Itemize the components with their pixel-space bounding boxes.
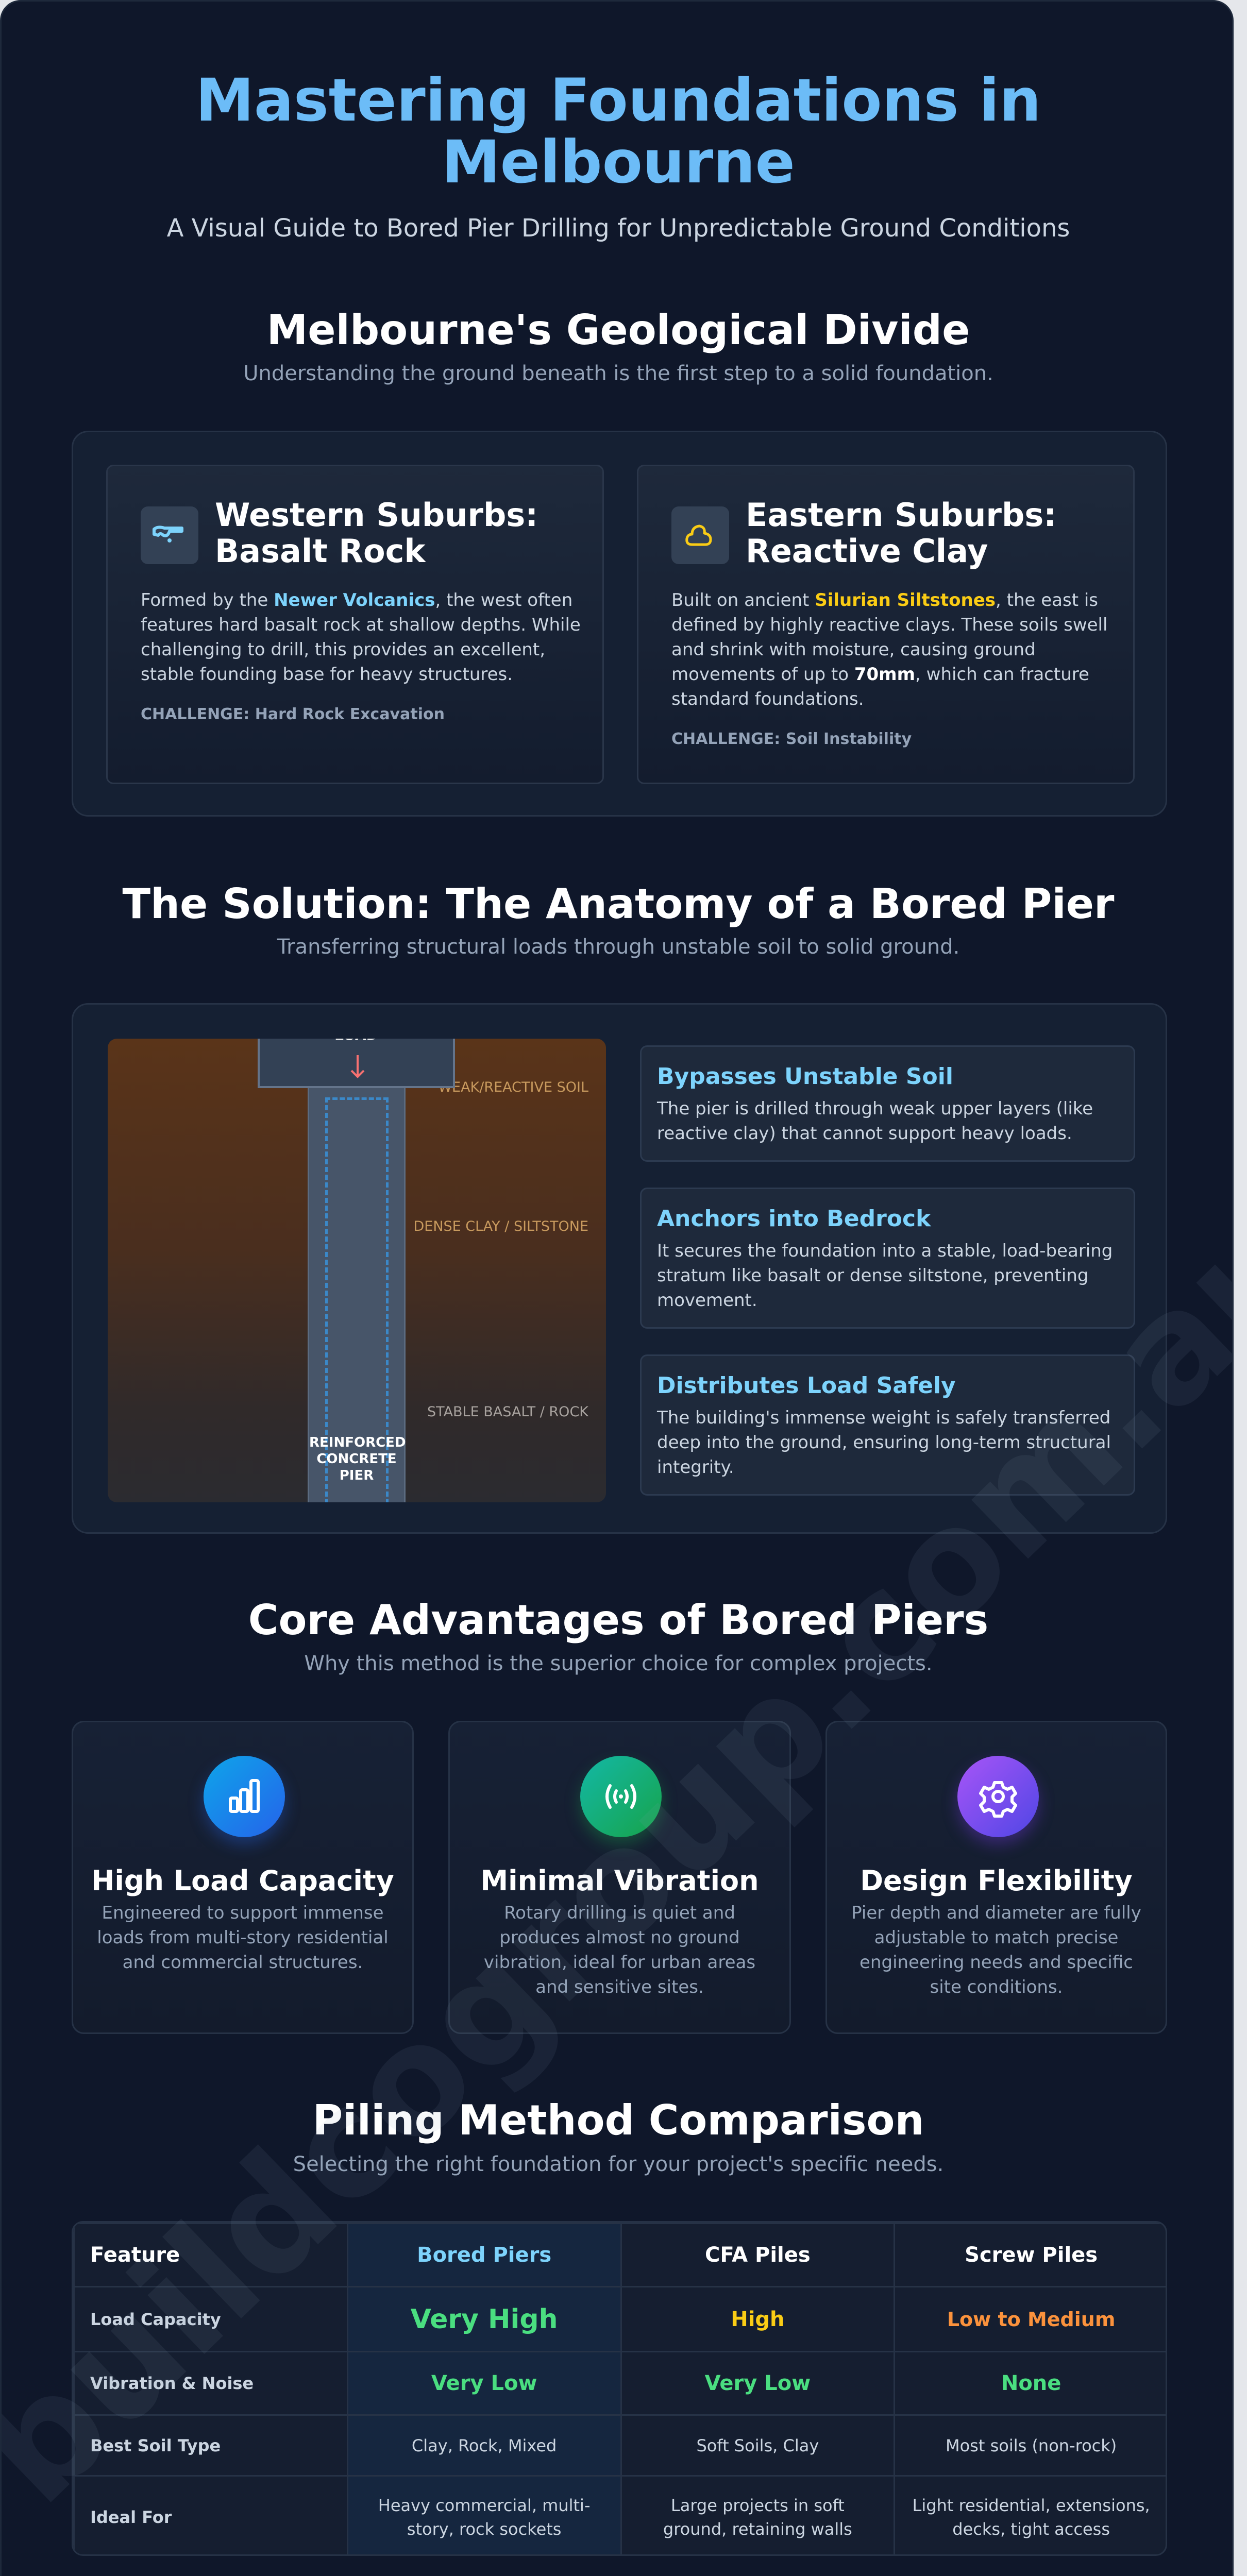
icon: basalt bbox=[141, 506, 198, 564]
diagram: bored pier bbox=[108, 1039, 606, 1502]
table: comparison: Soft Soils, Clay bbox=[696, 2436, 819, 2455]
advantage: vibration bbox=[448, 1721, 791, 2034]
pier shaft bbox=[308, 1088, 406, 1511]
table: comparison: Most soils (non-rock) bbox=[946, 2436, 1117, 2455]
heading: advantages: Core Advantages of Bored Piers bbox=[248, 1596, 988, 1644]
advantage: flexibility: Design Flexibility bbox=[860, 1865, 1133, 1897]
challenge: eastern: CHALLENGE: Soil Instability bbox=[671, 730, 912, 748]
panel: geological divide bbox=[72, 431, 1167, 817]
heading: solution: The Solution: The Anatomy of a Bored Pier bbox=[122, 880, 1115, 928]
label: basalt: STABLE BASALT / ROCK bbox=[427, 1404, 588, 1420]
table: comparison: Very Low bbox=[431, 2371, 537, 2395]
table: comparison: decks, tight access bbox=[952, 2519, 1110, 2539]
label: dense clay: DENSE CLAY / SILTSTONE bbox=[413, 1218, 588, 1234]
feature: bypasses: Bypasses Unstable Soil bbox=[657, 1063, 953, 1090]
card: western suburbs bbox=[106, 465, 604, 784]
table: comparison: Feature bbox=[90, 2243, 180, 2267]
label: pier bbox=[309, 1435, 406, 1483]
subtitle: A Visual Guide to Bored Pier Drilling for Unpredictable Ground Conditions bbox=[167, 214, 1070, 243]
icon: clay bbox=[671, 506, 729, 564]
heading: western: Western Suburbs: bbox=[215, 496, 538, 534]
title: Mastering Foundations in bbox=[195, 66, 1041, 134]
table: comparison bbox=[72, 2221, 1167, 2556]
table: comparison: Best Soil Type bbox=[90, 2436, 221, 2455]
table: comparison: ground, retaining walls bbox=[663, 2519, 852, 2539]
feature: distributes: Distributes Load Safely bbox=[657, 1372, 956, 1399]
table: comparison: Ideal For bbox=[90, 2507, 172, 2527]
feature: anchors: It secures the foundation into a stable, load-bearing stratum like basalt or dense siltstone, preventing movement. bbox=[657, 1241, 1113, 1311]
subheading: advantages: Why this method is the superior choice for complex projects. bbox=[304, 1652, 933, 1675]
table: comparison: Heavy commercial, multi- bbox=[378, 2496, 590, 2515]
load block bbox=[258, 1033, 455, 1088]
table: comparison: Large projects in soft bbox=[671, 2496, 845, 2515]
heading: eastern: Reactive Clay bbox=[746, 532, 988, 570]
advantage: vibration: Minimal Vibration bbox=[480, 1865, 759, 1897]
icon: bar chart bbox=[204, 1756, 285, 1837]
panel: anatomy bbox=[72, 1003, 1167, 1534]
text: eastern: Built on ancient Silurian Siltstones, the east is defined by highly reactive clays. These soils swell and shrink with moisture, causing ground movements of up to 70mm, which can fracture standard foundations. bbox=[671, 590, 1107, 709]
heading: western bbox=[215, 496, 538, 570]
table: comparison: Very Low bbox=[705, 2371, 811, 2395]
advantage: load capacity: High Load Capacity bbox=[91, 1865, 394, 1897]
feature: bypasses bbox=[640, 1045, 1135, 1162]
advantage: vibration: Rotary drilling is quiet and produces almost no ground vibration, ideal for urban areas and sensitive sites. bbox=[484, 1903, 755, 1997]
table: comparison: Screw Piles bbox=[965, 2243, 1098, 2267]
reinforcement cage bbox=[325, 1097, 389, 1520]
title bbox=[195, 66, 1041, 196]
feature: anchors bbox=[640, 1188, 1135, 1329]
subheading: comparison: Selecting the right foundation for your project's specific needs. bbox=[293, 2153, 943, 2176]
arrow: load bbox=[350, 1055, 365, 1078]
table: comparison: High bbox=[731, 2307, 785, 2331]
heading: western: Basalt Rock bbox=[215, 532, 426, 570]
table: comparison: Clay, Rock, Mixed bbox=[412, 2436, 557, 2455]
icon: vibration bbox=[580, 1756, 662, 1837]
table: comparison: Low to Medium bbox=[947, 2308, 1115, 2331]
advantage: flexibility bbox=[825, 1721, 1167, 2034]
feature: distributes: The building's immense weight is safely transferred deep into the ground, ensuring long-term structural integrity. bbox=[657, 1408, 1111, 1478]
table: comparison: Vibration & Noise bbox=[90, 2374, 254, 2393]
feature: bypasses: The pier is drilled through weak upper layers (like reactive clay) that cannot support heavy loads. bbox=[657, 1098, 1093, 1144]
table: comparison: Very High bbox=[411, 2304, 558, 2335]
heading: eastern: Eastern Suburbs: bbox=[746, 496, 1056, 534]
subheading: geological divide: Understanding the ground beneath is the first step to a solid foundation. bbox=[243, 362, 993, 385]
subheading: solution: Transferring structural loads through unstable soil to solid ground. bbox=[277, 935, 959, 959]
table: comparison: Light residential, extensions, bbox=[913, 2496, 1150, 2515]
table: comparison: Bored Piers bbox=[417, 2243, 551, 2267]
title: Melbourne bbox=[442, 128, 795, 196]
label: weak soil: WEAK/REACTIVE SOIL bbox=[438, 1079, 588, 1095]
heading: comparison: Piling Method Comparison bbox=[313, 2096, 924, 2144]
advantage: flexibility: Pier depth and diameter are fully adjustable to match precise engineering needs and specific site conditions. bbox=[851, 1903, 1141, 1997]
advantage: load capacity: Engineered to support immense loads from multi-story residential and commercial structures. bbox=[97, 1903, 389, 1973]
challenge: western: CHALLENGE: Hard Rock Excavation bbox=[141, 705, 445, 723]
text: western: Formed by the Newer Volcanics, the west often features hard basalt rock at shallow depths. While challenging to drill, this provides an excellent, stable founding base for heavy structures. bbox=[141, 590, 581, 685]
feature: anchors: Anchors into Bedrock bbox=[657, 1206, 931, 1232]
label: pier: CONCRETE bbox=[316, 1451, 397, 1467]
icon: gear bbox=[957, 1756, 1039, 1837]
heading: geological divide: Melbourne's Geological Divide bbox=[267, 306, 970, 354]
table: comparison: CFA Piles bbox=[705, 2243, 811, 2267]
heading: eastern bbox=[746, 496, 1056, 570]
feature: distributes bbox=[640, 1354, 1135, 1496]
table: comparison: story, rock sockets bbox=[407, 2519, 561, 2539]
card: eastern suburbs bbox=[637, 465, 1135, 784]
label: pier: PIER bbox=[340, 1468, 374, 1483]
table: comparison: None bbox=[1001, 2371, 1061, 2395]
advantage: load capacity bbox=[72, 1721, 414, 2034]
table: comparison: Load Capacity bbox=[90, 2309, 221, 2329]
label: pier: REINFORCED bbox=[309, 1435, 406, 1450]
